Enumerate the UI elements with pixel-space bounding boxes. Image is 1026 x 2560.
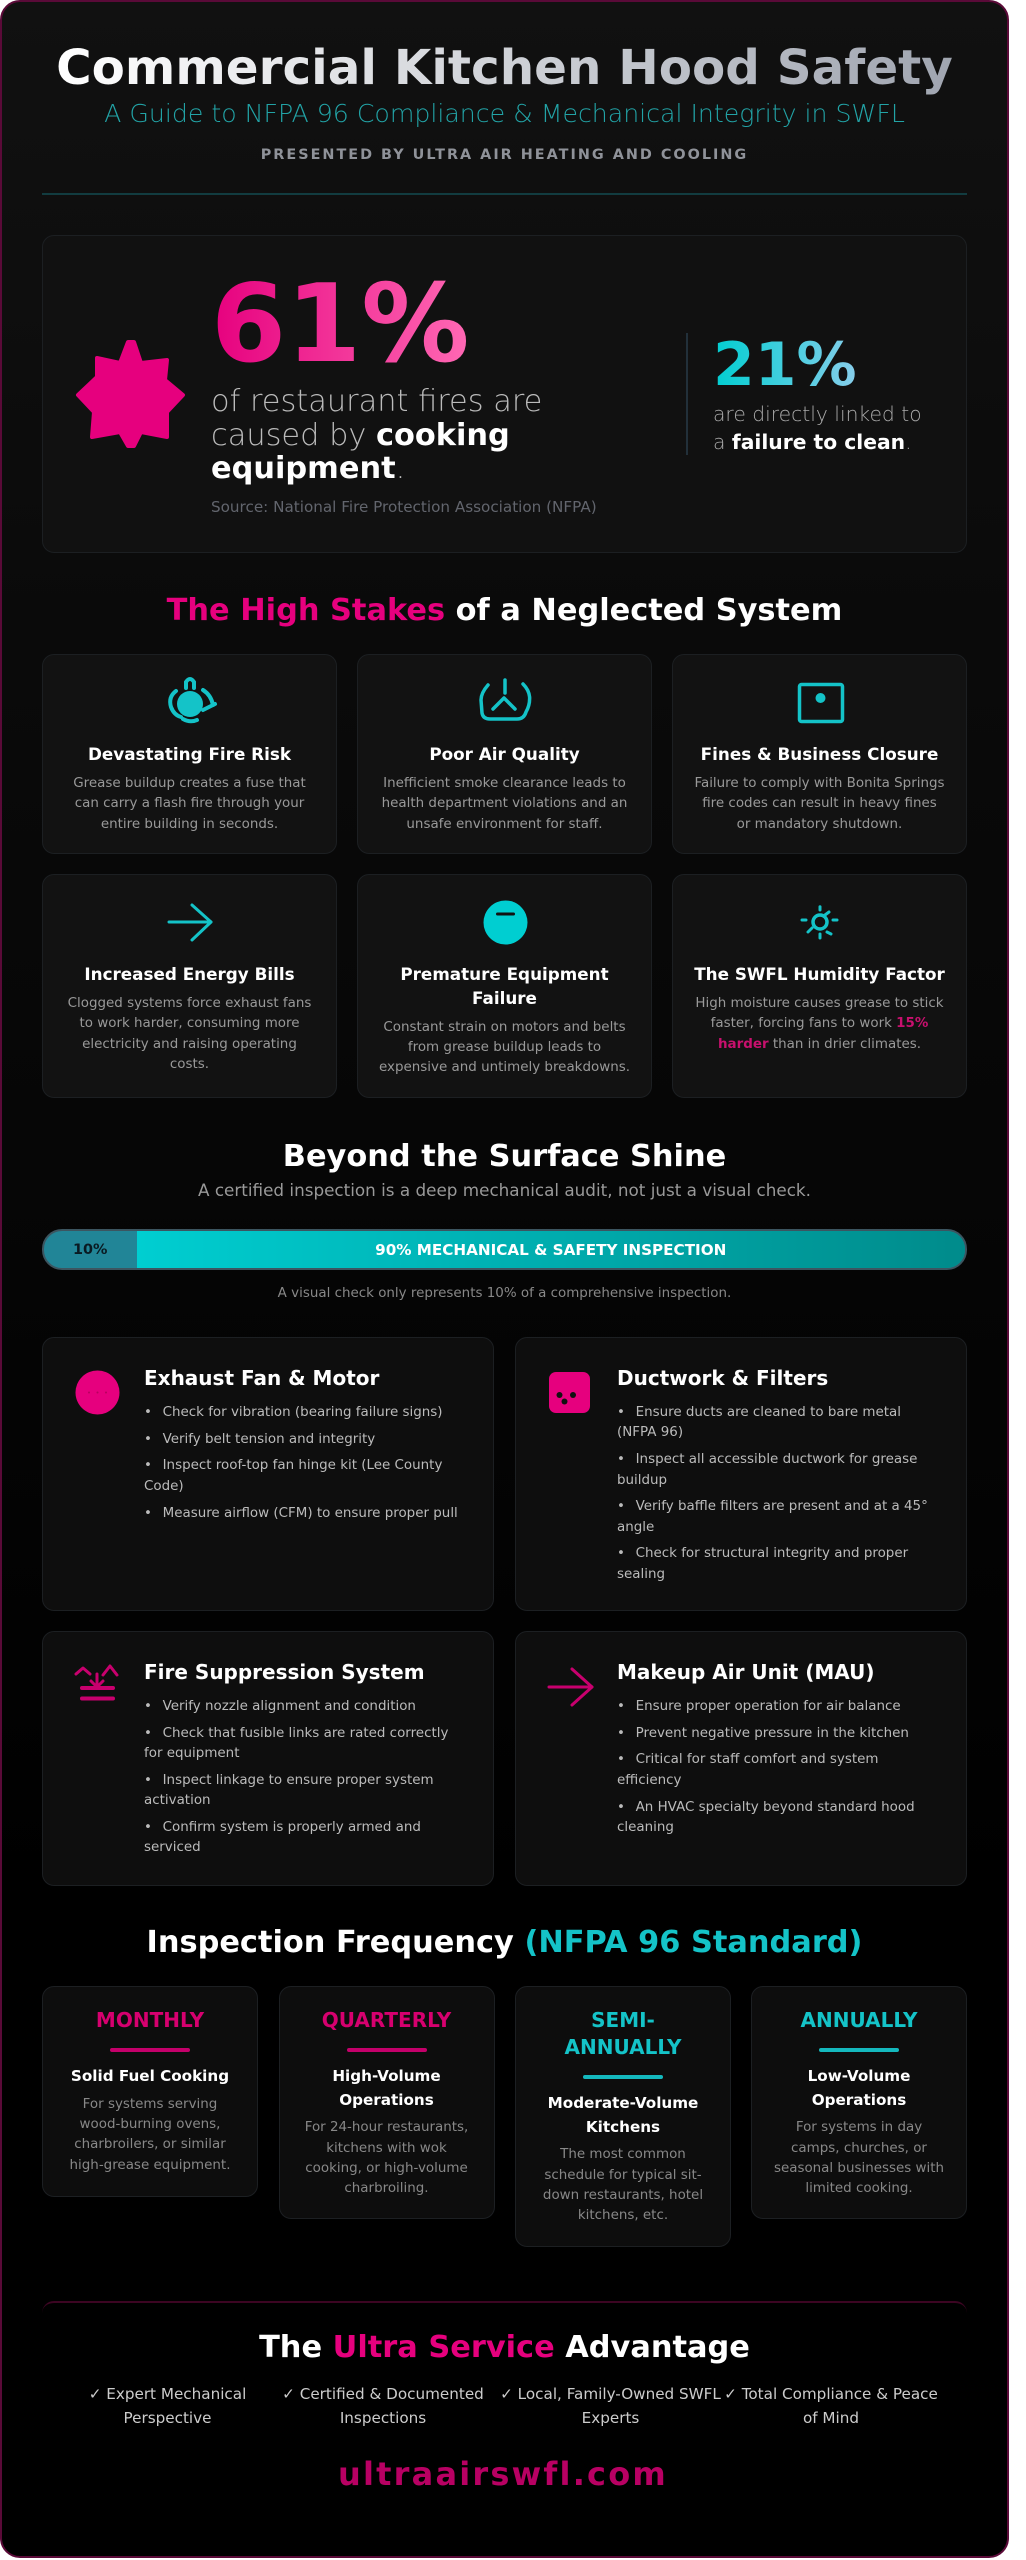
secondary stat text: a failure to clean.: [713, 430, 912, 454]
frequency label: ANNUALLY: [801, 2008, 917, 2032]
advantage 1: [89, 2385, 246, 2427]
checklist: Check for vibration (bearing failure signs): [163, 1405, 443, 1420]
text: The SWFL Humidity Factor: [694, 964, 945, 984]
checklist: An HVAC specialty beyond standard hood: [636, 1800, 915, 1815]
frequency description: limited cooking.: [805, 2181, 913, 2196]
checklist: (NFPA 96): [617, 1425, 683, 1440]
checklist: Verify baffle filters are present and at a 45°: [636, 1499, 928, 1514]
text: [379, 964, 630, 1075]
text: High moisture causes grease to stick: [695, 996, 944, 1011]
icon: arrow: [168, 903, 213, 942]
panel: quarterly: [278, 1986, 494, 2219]
title: Commercial Kitchen Hood Safety: [56, 40, 953, 96]
checklist: •: [144, 1458, 152, 1473]
frequency description: For 24-hour restaurants,: [305, 2120, 468, 2135]
panel: fines: [672, 654, 967, 854]
subtitle: A Guide to NFPA 96 Compliance & Mechanical Integrity in SWFL: [104, 99, 905, 128]
checklist: •: [617, 1726, 625, 1741]
frequency description: [305, 2120, 468, 2196]
text: to work harder, consuming more: [79, 1016, 300, 1031]
advantage 2: Inspections: [340, 2409, 426, 2427]
text: unsafe environment for staff.: [406, 817, 603, 832]
frequency description: [70, 2097, 230, 2173]
checklist: Code): [144, 1479, 184, 1494]
icon: sun: [800, 905, 838, 940]
frequency description: For systems serving: [83, 2097, 217, 2112]
checklist: [617, 1699, 915, 1835]
heading: ultra advantage: The Ultra Service Advantage: [259, 2330, 750, 2364]
title: Makeup Air Unit (MAU): [617, 1660, 875, 1684]
checklist: Check that fusible links are rated correctly: [163, 1726, 448, 1741]
frequency description: wood-burning ovens,: [80, 2117, 220, 2132]
checklist: •: [617, 1499, 625, 1514]
checklist: [617, 1405, 928, 1582]
text: harder than in drier climates.: [718, 1037, 921, 1052]
frequency label: [564, 2008, 682, 2058]
main stat text: caused by cooking: [211, 418, 510, 453]
checklist: sealing: [617, 1567, 665, 1582]
checklist: •: [144, 1405, 152, 1420]
text: entire building in seconds.: [101, 817, 278, 832]
text: Clogged systems force exhaust fans: [68, 996, 311, 1011]
bar caption: A visual check only represents 10% of a comprehensive inspection.: [278, 1286, 731, 1301]
title: Fire Suppression System: [144, 1660, 425, 1684]
website: ultraairswfl.com: [338, 2455, 668, 2493]
segment 90%: 90% MECHANICAL & SAFETY INSPECTION: [375, 1241, 726, 1259]
checklist: Critical for staff comfort and system: [636, 1752, 878, 1767]
frequency description: charbroiling.: [344, 2181, 429, 2196]
icon: fan: [76, 1370, 120, 1414]
frequency label: SEMI-: [591, 2008, 655, 2032]
panel: equipment failure: [357, 874, 652, 1098]
checklist: efficiency: [617, 1773, 682, 1788]
advantage 1: ✓ Expert Mechanical: [89, 2385, 246, 2403]
text: costs.: [170, 1057, 209, 1072]
presented by: PRESENTED BY ULTRA AIR HEATING AND COOLING: [261, 147, 748, 163]
checklist: serviced: [144, 1840, 201, 1855]
icon: closure sign: [798, 682, 844, 724]
panel: air quality: [357, 654, 652, 854]
advantage 3: ✓ Local, Family-Owned SWFL: [500, 2385, 721, 2403]
frequency type: Solid Fuel Cooking: [71, 2067, 229, 2085]
checklist: Inspect all accessible ductwork for grease: [636, 1452, 917, 1467]
text: Failure to comply with Bonita Springs: [694, 776, 945, 791]
title: Exhaust Fan & Motor: [144, 1366, 379, 1390]
checklist: •: [617, 1800, 625, 1815]
frequency description: For systems in day: [796, 2120, 922, 2135]
segment 90%: [136, 1231, 965, 1268]
frequency type: [332, 2067, 441, 2109]
frequency description: down restaurants, hotel: [543, 2188, 703, 2203]
checklist: Prevent negative pressure in the kitchen: [636, 1726, 909, 1741]
checklist: Inspect roof-top fan hinge kit (Lee County: [163, 1458, 442, 1473]
frequency description: camps, churches, or: [791, 2141, 927, 2156]
text: [68, 964, 311, 1072]
checklist: Verify belt tension and integrity: [163, 1432, 375, 1447]
frequency description: cooking, or high-volume: [305, 2161, 468, 2176]
checklist: •: [617, 1699, 625, 1714]
text: can carry a flash fire through your: [75, 796, 304, 811]
text: fire codes can result in heavy fines: [702, 796, 937, 811]
advantage 3: Experts: [582, 2409, 639, 2427]
progress bar: [42, 1229, 967, 1270]
advantage 2: ✓ Certified & Documented: [282, 2385, 484, 2403]
checklist: cleaning: [617, 1820, 674, 1835]
checklist: •: [144, 1506, 152, 1521]
frequency type: High-Volume: [332, 2067, 441, 2085]
secondary stat text: are directly linked to: [713, 402, 922, 426]
text: [382, 744, 627, 832]
panel: makeup air: [515, 1631, 967, 1886]
panel: fire risk: [42, 654, 337, 854]
icon: filled circle: [484, 900, 528, 944]
heading: beyond the surface: Beyond the Surface Shine: [283, 1139, 726, 1174]
text: [694, 744, 945, 832]
frequency description: kitchens with wok: [326, 2141, 447, 2156]
text: Poor Air Quality: [429, 744, 580, 764]
frequency description: schedule for typical sit-: [544, 2168, 702, 2183]
text: Constant strain on motors and belts: [383, 1020, 626, 1035]
icon: suppression nozzle: [74, 1664, 119, 1700]
main stat text: equipment.: [211, 451, 405, 486]
panel: exhaust fan: [42, 1337, 494, 1611]
advantage 4: of Mind: [803, 2409, 859, 2427]
frequency label: ANNUALLY: [565, 2034, 681, 2058]
section subtitle: A certified inspection is a deep mechanical audit, not just a visual check.: [198, 1180, 811, 1200]
frequency type: [548, 2094, 698, 2136]
frequency label: QUARTERLY: [322, 2008, 451, 2032]
text: health department violations and an: [382, 796, 627, 811]
panel: humidity: [672, 874, 967, 1098]
text: Failure: [472, 988, 537, 1008]
advantage 4: ✓ Total Compliance & Peace: [724, 2385, 938, 2403]
checklist: Verify nozzle alignment and condition: [163, 1699, 416, 1714]
panel: fire suppression: [42, 1631, 494, 1886]
icon: arrow: [548, 1667, 594, 1707]
frequency description: high-grease equipment.: [70, 2158, 230, 2173]
checklist: •: [617, 1452, 625, 1467]
main stat text: [211, 384, 542, 486]
checklist: Ensure proper operation for air balance: [636, 1699, 901, 1714]
frequency label: MONTHLY: [96, 2008, 204, 2032]
panel: ductwork: [515, 1337, 967, 1611]
checklist: [144, 1405, 458, 1521]
frequency type: Operations: [812, 2091, 906, 2109]
frequency type: Low-Volume: [808, 2067, 910, 2085]
text: or mandatory shutdown.: [737, 817, 902, 832]
icon: hood: [479, 678, 532, 721]
checklist: for equipment: [144, 1746, 239, 1761]
text: Inefficient smoke clearance leads to: [383, 776, 626, 791]
panel: monthly: [42, 1986, 258, 2197]
text: Fines & Business Closure: [701, 744, 938, 764]
icon: filter: [549, 1372, 590, 1413]
frequency type: Kitchens: [586, 2118, 660, 2136]
source: Source: National Fire Protection Association (NFPA): [211, 498, 597, 516]
checklist: •: [144, 1773, 152, 1788]
panel: hero statistic: [42, 235, 967, 553]
panel: energy bills: [42, 874, 337, 1098]
frequency description: charbroilers, or similar: [74, 2137, 226, 2152]
checklist: •: [144, 1699, 152, 1714]
segment 10%: 10%: [73, 1242, 107, 1258]
checklist: buildup: [617, 1473, 667, 1488]
title: Ductwork & Filters: [617, 1366, 828, 1390]
checklist: Inspect linkage to ensure proper system: [163, 1773, 434, 1788]
text: [73, 744, 306, 832]
text: faster, forcing fans to work 15%: [711, 1016, 928, 1031]
text: expensive and untimely breakdowns.: [379, 1060, 630, 1075]
frequency description: [543, 2147, 703, 2223]
main stat 61%: 61%: [211, 262, 470, 387]
checklist: activation: [144, 1793, 211, 1808]
icon: fire ring: [168, 677, 218, 724]
frequency description: The most common: [560, 2147, 686, 2162]
text: Premature Equipment: [400, 964, 609, 984]
advantage 1: Perspective: [124, 2409, 211, 2427]
frequency type: [808, 2067, 910, 2109]
advantage 2: [282, 2385, 484, 2427]
secondary stat 21%: 21%: [713, 330, 857, 400]
checklist: angle: [617, 1520, 654, 1535]
text: from grease buildup leads to: [408, 1040, 601, 1055]
checklist: [144, 1699, 448, 1855]
text: electricity and raising operating: [82, 1037, 297, 1052]
frequency description: kitchens, etc.: [578, 2208, 668, 2223]
icon: burst: [76, 340, 186, 448]
advantage 3: [500, 2385, 721, 2427]
text: [694, 964, 945, 1052]
checklist: •: [617, 1405, 625, 1420]
checklist: •: [144, 1432, 152, 1447]
text: Grease buildup creates a fuse that: [73, 776, 306, 791]
checklist: •: [144, 1726, 152, 1741]
checklist: Confirm system is properly armed and: [163, 1820, 421, 1835]
frequency description: [774, 2120, 944, 2196]
heading: inspection frequency: Inspection Frequency (NFPA 96 Standard): [147, 1925, 862, 1960]
checklist: •: [617, 1546, 625, 1561]
text: Devastating Fire Risk: [88, 744, 291, 764]
checklist: Ensure ducts are cleaned to bare metal: [636, 1405, 901, 1420]
checklist: •: [144, 1820, 152, 1835]
checklist: Check for structural integrity and proper: [636, 1546, 908, 1561]
heading: high stakes: The High Stakes of a Neglected System: [167, 592, 842, 628]
frequency type: Moderate-Volume: [548, 2094, 698, 2112]
secondary stat text: [713, 402, 922, 454]
panel: semi-annually: [515, 1986, 731, 2247]
main stat text: of restaurant fires are: [211, 384, 542, 419]
checklist: Measure airflow (CFM) to ensure proper pull: [163, 1506, 458, 1521]
checklist: •: [617, 1752, 625, 1767]
text: Increased Energy Bills: [84, 964, 295, 984]
frequency description: seasonal businesses with: [774, 2161, 944, 2176]
frequency type: Operations: [339, 2091, 434, 2109]
panel: annually: [751, 1986, 967, 2219]
advantage 4: [724, 2383, 938, 2430]
